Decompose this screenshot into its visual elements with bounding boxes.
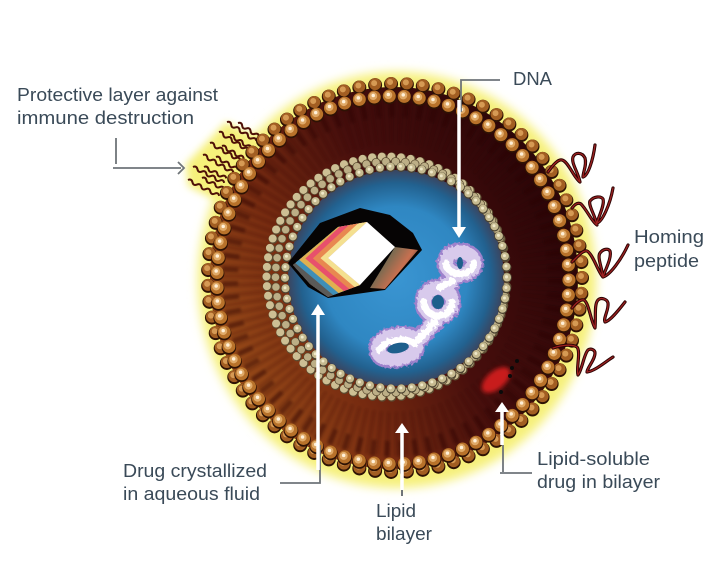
lipid shell [210,87,578,469]
label: drug crystallized: Drug crystallized [123,461,267,481]
DNA strand [378,252,474,359]
innermost lipid heads [284,166,507,389]
arrow: DNA [452,80,500,238]
arrow: lipid bilayer [395,423,409,496]
label: homing peptide: Homing [634,227,704,247]
label: DNA: DNA [513,69,552,89]
arrow: lipid-soluble drug [495,402,532,473]
drug crystal [285,208,422,305]
label: homing peptide: peptide [634,251,699,271]
aqueous core [288,170,504,386]
protective layer squiggles [187,121,264,197]
halo: yellow protective glow [186,72,596,488]
label: lipid bilayer: bilayer [376,524,432,544]
lipid-soluble drug deposit [477,359,519,398]
label: protective layer: immune destruction [17,108,194,128]
label: lipid-soluble drug: drug in bilayer [537,472,660,492]
arrow: protective layer [113,138,184,174]
outer lipid heads [207,82,582,472]
label: drug crystallized: in aqueous fluid [123,484,260,504]
inner lipid heads [266,156,507,397]
homing peptides [548,145,628,375]
label: lipid-soluble drug: Lipid-soluble [537,449,650,469]
arrow: drug crystal [280,304,325,483]
label: lipid bilayer: Lipid [376,501,416,521]
label: protective layer: Protective layer against [17,85,218,105]
